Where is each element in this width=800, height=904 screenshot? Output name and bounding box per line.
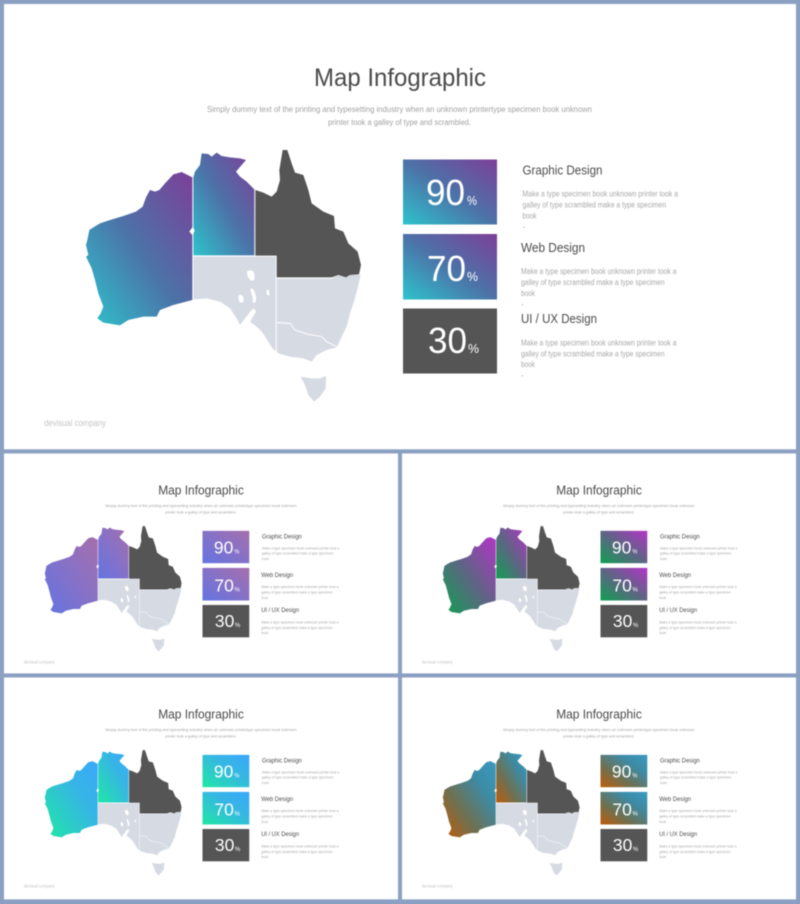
subtitle: printer took a galley of type and scrambled.	[563, 734, 634, 739]
region: Queensland	[129, 750, 182, 813]
text block: UI / UX Design: -	[521, 371, 524, 380]
text block: Graphic Design: Graphic Design	[522, 162, 602, 178]
subtitle	[503, 503, 695, 515]
stat box 90%: 90	[612, 537, 631, 557]
text block: Web Design: Make a type specimen book unknown printer took a	[261, 808, 339, 813]
stat box 70%: %	[234, 810, 240, 817]
region: South Australia	[98, 803, 139, 850]
text block: Graphic Design: galley of type scrambled make a type specimen	[660, 775, 731, 780]
text block: Graphic Design: book	[262, 780, 269, 785]
stat box 30%	[601, 829, 647, 861]
text block: UI / UX Design	[521, 311, 677, 380]
text block: Web Design: Web Design	[261, 796, 293, 803]
region: Northern Territory	[98, 527, 129, 579]
stat box 30%: %	[468, 341, 479, 356]
region: Western Australia	[443, 537, 496, 613]
map of Australia	[443, 750, 580, 875]
subtitle: printer took a galley of type and scrambled.	[165, 734, 236, 739]
text block: UI / UX Design: book	[521, 360, 536, 369]
text block: Graphic Design: Graphic Design	[262, 757, 302, 764]
stat box 70%	[203, 792, 249, 825]
text block: Graphic Design	[522, 162, 678, 232]
state border	[538, 836, 568, 848]
stat box 90%: %	[632, 772, 638, 779]
map of Australia	[86, 150, 361, 402]
map of Australia	[45, 750, 182, 875]
text block: UI / UX Design: galley of type scrambled make a type specimen	[659, 625, 731, 630]
text block: Graphic Design	[262, 757, 340, 785]
text block: Graphic Design: galley of type scrambled make a type specimen	[522, 200, 666, 210]
panel: aqua variant slide	[4, 677, 398, 899]
subtitle: Simply dummy text of the printing and typesetting industry when an unknown printertype specimen book unknown	[503, 727, 695, 732]
stat box 70%	[601, 568, 647, 601]
text block: UI / UX Design	[261, 607, 339, 635]
stat box 90%: %	[234, 548, 240, 555]
region: Western Australia	[45, 761, 98, 837]
stat box 90%: 90	[612, 761, 631, 781]
text block: Graphic Design: Make a type specimen book unknown printer took a	[660, 769, 738, 774]
region: New South Wales and Victoria	[277, 275, 361, 362]
title: Map Infographic	[314, 64, 486, 92]
stat box 70%: %	[632, 810, 638, 817]
text block: Graphic Design: Make a type specimen book unknown printer took a	[262, 545, 340, 550]
text block: Graphic Design: book	[660, 556, 667, 561]
stat box 90%: %	[467, 193, 477, 208]
text block: UI / UX Design: UI / UX Design	[659, 831, 697, 838]
subtitle	[207, 105, 592, 127]
text block: Graphic Design: Make a type specimen book unknown printer took a	[660, 545, 738, 550]
region: South Australia	[98, 579, 139, 626]
subtitle	[105, 503, 297, 515]
stat box 30%: %	[633, 622, 639, 629]
stat box 30%: 30	[613, 835, 632, 855]
stat box 90%	[601, 755, 647, 787]
state border	[140, 836, 170, 848]
stat box 30%	[403, 308, 497, 374]
text block: Graphic Design: book	[522, 212, 537, 220]
text block: Graphic Design	[660, 533, 738, 561]
text block: UI / UX Design	[659, 607, 737, 635]
text block: Web Design	[659, 796, 737, 824]
stat box 90%: %	[234, 772, 240, 779]
subtitle	[105, 727, 297, 739]
title: Map Infographic	[158, 483, 244, 497]
panel: orange-teal variant slide	[402, 677, 796, 899]
region: New South Wales and Victoria	[140, 812, 181, 855]
text block: Graphic Design: Graphic Design	[660, 533, 700, 540]
text block: Web Design: Web Design	[261, 572, 293, 579]
stat box 90%	[203, 531, 249, 563]
text block: Web Design: galley of type scrambled make a type specimen	[659, 589, 731, 594]
text block: UI / UX Design: UI / UX Design	[659, 607, 697, 614]
subtitle	[503, 727, 695, 739]
stat box 30%: 30	[613, 611, 632, 631]
text block: Web Design: Make a type specimen book unknown printer took a	[659, 808, 737, 813]
text block: UI / UX Design: galley of type scrambled make a type specimen	[261, 849, 333, 854]
text block: UI / UX Design: book	[659, 630, 666, 635]
text block: Graphic Design	[262, 533, 340, 561]
region: Tasmania	[152, 639, 164, 651]
footer company name: devisual company	[422, 659, 453, 664]
text block: UI / UX Design: book	[261, 854, 268, 859]
region: South Australia	[496, 803, 537, 850]
text block: UI / UX Design: book	[261, 630, 268, 635]
text block: Web Design: Web Design	[659, 796, 691, 803]
stat box 90%: 90	[426, 172, 465, 213]
text block: UI / UX Design	[659, 831, 737, 859]
region: New South Wales and Victoria	[538, 588, 579, 631]
stat box 30%	[203, 605, 249, 637]
region: Tasmania	[550, 639, 562, 651]
text block: Graphic Design	[660, 757, 738, 785]
region: New South Wales and Victoria	[538, 812, 579, 855]
panel: violet variant slide	[4, 453, 398, 673]
stat box 90%: %	[632, 548, 638, 555]
subtitle: Simply dummy text of the printing and typesetting industry when an unknown printertype specimen book unknown	[105, 727, 297, 732]
text block: UI / UX Design: UI / UX Design	[521, 311, 597, 326]
state border	[538, 612, 568, 624]
stat box 30%: %	[633, 846, 639, 853]
subtitle: printer took a galley of type and scrambled.	[165, 510, 236, 515]
text block: Graphic Design: -	[522, 222, 526, 232]
subtitle: Simply dummy text of the printing and typesetting industry when an unknown printertype specimen book unknown	[207, 105, 592, 114]
region: Western Australia	[86, 172, 192, 325]
region: Northern Territory	[496, 751, 527, 803]
state border	[140, 612, 170, 624]
stat box 90%	[203, 755, 249, 787]
text block: UI / UX Design: galley of type scrambled make a type specimen	[521, 350, 664, 358]
text block: Graphic Design: galley of type scrambled make a type specimen	[660, 551, 731, 556]
stat box 70%: 70	[214, 575, 234, 595]
stat box 70%: %	[467, 269, 478, 284]
region: Tasmania	[152, 863, 164, 875]
stat box 90%: 90	[214, 761, 233, 781]
text block: Web Design: Web Design	[659, 572, 691, 579]
text block: Web Design	[261, 796, 339, 824]
map of Australia	[45, 526, 182, 651]
panel: main slide	[4, 4, 796, 449]
map of Australia	[443, 526, 580, 651]
stat box 30%: %	[235, 846, 241, 853]
region: South Australia	[193, 257, 276, 352]
region: Western Australia	[443, 761, 496, 837]
footer company name: devisual company	[422, 883, 453, 888]
region: Northern Territory	[98, 751, 129, 803]
stat box 30%: 30	[215, 611, 234, 631]
text block: Graphic Design: Graphic Design	[660, 757, 700, 764]
stat box 70%: 70	[612, 575, 632, 595]
text block: UI / UX Design: Make a type specimen book unknown printer took a	[521, 338, 677, 348]
text block: Graphic Design: book	[660, 780, 667, 785]
text block: UI / UX Design: Make a type specimen book unknown printer took a	[261, 843, 339, 848]
subtitle: printer took a galley of type and scrambled.	[563, 510, 634, 515]
text block: UI / UX Design: Make a type specimen book unknown printer took a	[659, 619, 737, 624]
text block: Graphic Design: Graphic Design	[262, 533, 302, 540]
region: Western Australia	[45, 537, 98, 613]
title: Map Infographic	[556, 707, 642, 721]
subtitle: printer took a galley of type and scrambled.	[328, 118, 471, 127]
stat box 70%	[601, 792, 647, 825]
stat box 30%: 30	[215, 835, 234, 855]
region: Northern Territory	[496, 527, 527, 579]
text block: Web Design: book	[261, 595, 268, 600]
stat box 70%: 70	[427, 248, 466, 289]
text block: UI / UX Design: book	[659, 854, 666, 859]
region: New South Wales and Victoria	[140, 588, 181, 631]
text block: Web Design: Make a type specimen book unknown printer took a	[659, 584, 737, 589]
text block: Graphic Design: Make a type specimen book unknown printer took a	[522, 190, 678, 198]
text block: Graphic Design: galley of type scrambled make a type specimen	[262, 551, 333, 556]
state border	[277, 323, 337, 347]
region: Queensland	[255, 150, 361, 277]
region: Queensland	[527, 526, 580, 589]
text block: Web Design: galley of type scrambled make a type specimen	[521, 278, 664, 287]
text block: Web Design: galley of type scrambled make a type specimen	[659, 813, 731, 818]
text block: Web Design: Make a type specimen book unknown printer took a	[521, 267, 677, 276]
text block: Graphic Design: Make a type specimen book unknown printer took a	[262, 769, 340, 774]
text block: Web Design: galley of type scrambled make a type specimen	[261, 589, 333, 594]
text block: Web Design	[521, 240, 677, 309]
text block: Web Design: book	[659, 595, 666, 600]
stat box 70%: 70	[612, 799, 632, 819]
stat box 70%: %	[632, 586, 638, 593]
region: Queensland	[129, 526, 182, 589]
footer company name: devisual company	[24, 883, 55, 888]
stat box 30%	[203, 829, 249, 861]
title: Map Infographic	[556, 483, 642, 497]
text block: Web Design: Make a type specimen book unknown printer took a	[261, 584, 339, 589]
text block: Web Design: Web Design	[521, 240, 585, 255]
text block: Web Design: book	[261, 819, 268, 824]
region: South Australia	[496, 579, 537, 626]
stat box 70%	[403, 234, 497, 300]
stat box 70%: %	[234, 586, 240, 593]
footer company name: devisual company	[44, 418, 106, 428]
stat box 90%: 90	[214, 537, 233, 557]
text block: UI / UX Design: galley of type scrambled make a type specimen	[261, 625, 333, 630]
region: Tasmania	[301, 376, 326, 402]
text block: UI / UX Design: Make a type specimen book unknown printer took a	[659, 843, 737, 848]
text block: Web Design	[659, 572, 737, 600]
text block: Web Design: -	[521, 300, 524, 309]
text block: UI / UX Design: UI / UX Design	[261, 607, 299, 614]
stat box 90%	[601, 531, 647, 563]
text block: Web Design: galley of type scrambled make a type specimen	[261, 813, 333, 818]
text block: Graphic Design: book	[262, 556, 269, 561]
region: Queensland	[527, 750, 580, 813]
stat box 70%: 70	[214, 799, 234, 819]
region: Tasmania	[550, 863, 562, 875]
subtitle: Simply dummy text of the printing and typesetting industry when an unknown printertype specimen book unknown	[105, 503, 297, 508]
text block: Web Design	[261, 572, 339, 600]
text block: UI / UX Design	[261, 831, 339, 859]
footer company name: devisual company	[24, 659, 55, 664]
stat box 90%	[403, 160, 497, 224]
subtitle: Simply dummy text of the printing and typesetting industry when an unknown printertype specimen book unknown	[503, 503, 695, 508]
stat box 30%: 30	[428, 320, 467, 361]
title: Map Infographic	[158, 707, 244, 721]
text block: Web Design: book	[659, 819, 666, 824]
text block: UI / UX Design: galley of type scrambled make a type specimen	[659, 849, 731, 854]
text block: UI / UX Design: Make a type specimen book unknown printer took a	[261, 619, 339, 624]
stat box 70%	[203, 568, 249, 601]
text block: UI / UX Design: UI / UX Design	[261, 831, 299, 838]
panel: magenta-green variant slide	[402, 453, 796, 673]
region: Northern Territory	[193, 153, 254, 255]
text block: Web Design: book	[521, 289, 536, 298]
text block: Graphic Design: galley of type scrambled make a type specimen	[262, 775, 333, 780]
stat box 30%	[601, 605, 647, 637]
stat box 30%: %	[235, 622, 241, 629]
